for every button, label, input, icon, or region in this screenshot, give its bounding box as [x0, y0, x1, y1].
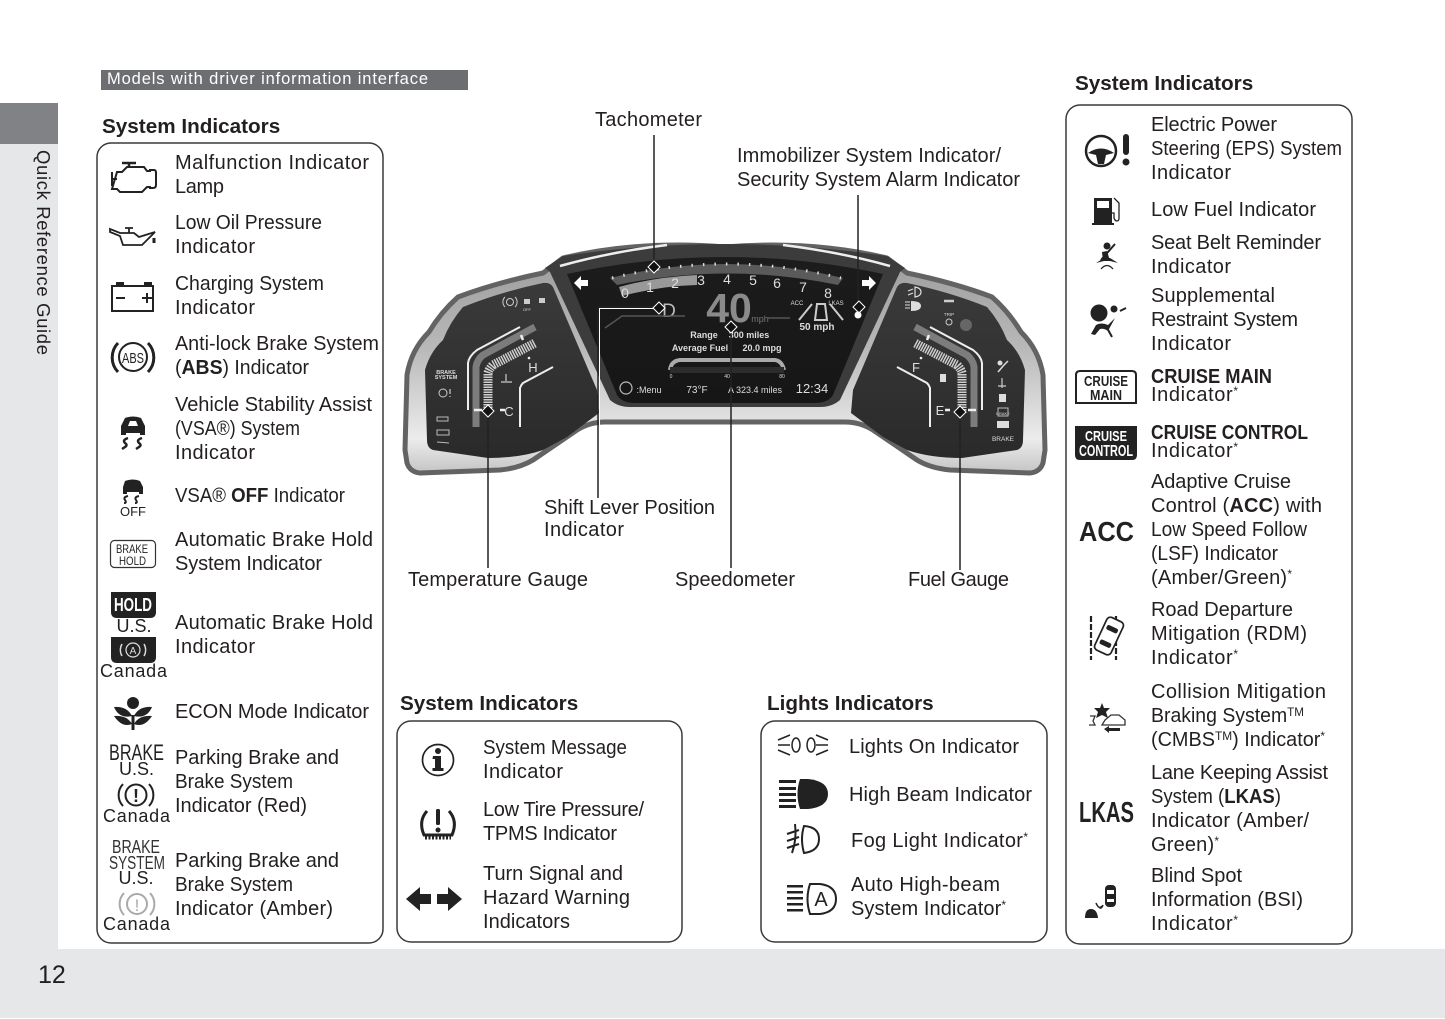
pod labels and tell-tales [435, 287, 1015, 443]
screen readouts: LKAS [828, 301, 844, 307]
icon: auto high beam [787, 884, 836, 914]
pod labels and tell-tales: E [936, 403, 945, 418]
icon: seat belt [1096, 242, 1118, 269]
row: srs: Indicator [1151, 333, 1231, 355]
row: bsi: Information (BSI) [1151, 889, 1303, 911]
callout: tachometer [595, 109, 702, 273]
screen readouts: 2 [671, 275, 679, 291]
panel: right system indicators [1066, 105, 1352, 944]
row: bsi: Indicator [1151, 913, 1233, 935]
row: rdm: Indicator [1151, 647, 1233, 669]
heading: middle system indicators: System Indicators [400, 692, 578, 715]
row: parking brake amber: Parking Brake and [175, 850, 339, 872]
row: cruise control [1151, 422, 1308, 462]
icon: brake hold outline: BRAKE [116, 542, 148, 556]
screen readouts: 40 [706, 285, 752, 331]
icon: turn arrows [406, 887, 462, 911]
row: malfunction indicator: Lamp [175, 176, 224, 198]
icon: brake amber: BRAKE [112, 837, 160, 857]
row: acc: Control (ACC) with [1151, 495, 1322, 517]
pod labels and tell-tales: BRAKE [436, 370, 456, 376]
row: parking brake red [175, 747, 339, 817]
icon: cruise control [1075, 426, 1137, 460]
row: cmbs: TM [1287, 705, 1304, 719]
row: cruise main: * [1233, 384, 1238, 398]
icon: steering wheel [1086, 134, 1130, 166]
row: system message [483, 737, 627, 783]
row: seat belt: Seat Belt Reminder [1151, 232, 1321, 254]
sidebar tab [0, 103, 58, 144]
pod labels and tell-tales: OFF [523, 307, 532, 312]
row: cruise main [1151, 366, 1272, 406]
row: bsi [1151, 865, 1303, 935]
row: cruise main: Indicator [1151, 384, 1233, 406]
sidebar label: Quick Reference Guide [33, 150, 54, 355]
row: system message: System Message [483, 737, 627, 759]
row: auto high beam: System Indicator [851, 898, 1001, 920]
screen readouts: 4 [723, 271, 731, 287]
icon: auto high beam: A [814, 889, 828, 911]
row: cruise control: CRUISE CONTROL [1151, 422, 1308, 444]
pod labels and tell-tales: HOLD [996, 423, 1010, 429]
pod labels and tell-tales: H [528, 360, 538, 375]
row: lkas: * [1214, 834, 1219, 848]
row: lkas: Indicator (Amber/ [1151, 810, 1309, 832]
row: lkas: System (LKAS) [1151, 786, 1281, 808]
row: charging system [175, 273, 324, 319]
screen readouts [574, 271, 876, 396]
row: rdm: Road Departure [1151, 599, 1293, 621]
screen readouts: 1 [646, 279, 654, 295]
row: turn signal: Turn Signal and [483, 863, 623, 885]
icon: cruise main: MAIN [1090, 387, 1122, 404]
row: malfunction indicator [175, 152, 369, 198]
panel: left system indicators [97, 143, 383, 943]
heading: lights indicators: Lights Indicators [767, 692, 934, 715]
row: cmbs [1151, 681, 1326, 751]
callout: tachometer: Tachometer [595, 109, 702, 131]
row: turn signal: Hazard Warning [483, 887, 630, 909]
icon: cmbs [1089, 703, 1125, 733]
callout: fuel gauge [908, 406, 1009, 591]
icon: acc: ACC [1079, 516, 1134, 547]
row: acc: Low Speed Follow [1151, 519, 1308, 541]
icon: rdm [1091, 616, 1125, 660]
row: bsi: Blind Spot [1151, 865, 1242, 887]
icon: vsa off: OFF [120, 504, 146, 519]
icon: lkas: LKAS [1079, 797, 1134, 829]
icon: brake hold outline [110, 540, 156, 568]
cluster bezel [405, 245, 1045, 473]
screen readouts: D [662, 301, 676, 322]
row: auto high beam: * [1001, 898, 1006, 912]
icon: brake amber: U.S. [118, 868, 154, 888]
row: rdm [1151, 599, 1307, 669]
screen readouts: 40 [724, 374, 730, 380]
panel: middle system indicators [397, 721, 682, 942]
icon: hold us canada: Canada [100, 661, 168, 681]
heading: right system indicators: System Indicators [1075, 72, 1253, 95]
row: parking brake amber: Indicator (Amber) [175, 898, 333, 920]
icon: battery [112, 284, 153, 311]
row: rdm: * [1233, 647, 1238, 661]
row: srs: Restraint System [1151, 309, 1298, 331]
row: cruise control: * [1233, 440, 1238, 454]
icon: lights on [778, 735, 828, 755]
right gauge pod [851, 283, 1025, 458]
icon: hold us canada: A [130, 646, 137, 657]
icon: brake amber: Canada [103, 914, 171, 934]
row: automatic brake hold: Indicator [175, 636, 255, 658]
screen readouts: 80 [779, 374, 785, 380]
row: eps: Indicator [1151, 162, 1231, 184]
row: acc: (LSF) Indicator [1151, 543, 1278, 565]
row: rdm: Mitigation (RDM) [1151, 623, 1307, 645]
row: turn signal [483, 863, 630, 933]
icon: brake red: U.S. [119, 759, 154, 779]
row: malfunction indicator: Malfunction Indicator [175, 152, 369, 174]
icon: brake red: Canada [103, 806, 171, 826]
row: acc [1151, 471, 1322, 589]
icon: brake red: BRAKE [109, 740, 164, 765]
row: automatic brake hold [175, 612, 373, 658]
icon: cruise main [1076, 371, 1136, 404]
row: cmbs: (CMBS [1151, 729, 1215, 751]
row: eps [1151, 114, 1342, 184]
model banner: Models with driver information interface [107, 70, 428, 88]
center screen [545, 244, 905, 407]
row: parking brake red: Parking Brake and [175, 747, 339, 769]
row: eps: Electric Power [1151, 114, 1277, 136]
tachometer arc [610, 264, 843, 296]
row: oil pressure: Low Oil Pressure [175, 212, 322, 234]
row: bsi: * [1233, 913, 1238, 927]
icon: high beam [779, 779, 828, 809]
icon: hold us canada: U.S. [116, 616, 152, 636]
row: vsa off: VSA® OFF Indicator [175, 485, 345, 507]
pod labels and tell-tales: SYSTEM [435, 375, 458, 381]
icon: brake red [103, 740, 171, 826]
icon: brake amber: SYSTEM [109, 853, 165, 873]
row: fog light: Fog Light Indicator [851, 830, 1023, 852]
row: eps: Steering (EPS) System [1151, 138, 1342, 160]
icon: vsa [121, 416, 145, 449]
screen readouts: Range [690, 330, 718, 340]
row: fog light: * [1023, 830, 1028, 844]
icon: econ leaf [114, 697, 152, 730]
screen readouts: :Menu [636, 385, 662, 395]
row: parking brake red: Brake System [175, 771, 293, 793]
row: vsa [175, 394, 372, 464]
icon: fog light [787, 824, 819, 853]
icon: abs: ABS [122, 350, 144, 367]
pod labels and tell-tales: F [912, 360, 920, 375]
screen readouts: 8 [824, 285, 832, 301]
row: vsa: Vehicle Stability Assist [175, 394, 372, 416]
row: turn signal: Indicators [483, 911, 570, 933]
icon: oil can [110, 228, 155, 245]
callout: fuel gauge: Fuel Gauge [908, 569, 1009, 591]
row: cmbs: ) Indicator [1232, 729, 1321, 751]
row: lkas [1151, 762, 1328, 856]
row: acc: (Amber/Green) [1151, 567, 1287, 589]
row: acc: * [1287, 567, 1292, 581]
row: seat belt [1151, 232, 1321, 278]
icon: info [422, 744, 454, 776]
row: tpms: Low Tire Pressure/ [483, 799, 644, 821]
screen readouts: 6 [773, 275, 781, 291]
row: seat belt: Indicator [1151, 256, 1231, 278]
screen readouts: 50 mph [799, 322, 835, 333]
row: lights on: Lights On Indicator [849, 736, 1019, 758]
panel: lights indicators [761, 721, 1047, 942]
pod labels and tell-tales: BRAKE [992, 436, 1015, 443]
row: oil pressure [175, 212, 322, 258]
screen readouts: Average Fuel [672, 343, 728, 353]
row: parking brake amber [175, 850, 339, 920]
icon: cruise main: CRUISE [1084, 373, 1128, 390]
row: cruise main: CRUISE MAIN [1151, 366, 1272, 388]
icon: hold us canada [100, 592, 168, 681]
row: oil pressure: Indicator [175, 236, 255, 258]
pod labels and tell-tales: TRIP [944, 312, 954, 317]
screen readouts: 0 [621, 285, 629, 301]
screen readouts: ACC [791, 301, 804, 307]
row: parking brake red: Indicator (Red) [175, 795, 307, 817]
row: cruise control: Indicator [1151, 440, 1233, 462]
pod labels and tell-tales: C [504, 404, 514, 419]
heading: left system indicators: System Indicators [102, 115, 280, 138]
row: econ: ECON Mode Indicator [175, 701, 369, 723]
callout: shift lever: Indicator [544, 519, 624, 541]
row: cmbs: TM [1215, 729, 1232, 743]
row: system message: Indicator [483, 761, 563, 783]
row: vsa: (VSA®) System [175, 418, 300, 440]
row: vsa: Indicator [175, 442, 255, 464]
screen readouts: 300 miles [729, 330, 769, 340]
row: tpms: TPMS Indicator [483, 823, 617, 845]
icon: cruise control: CONTROL [1079, 443, 1133, 460]
row: auto high beam [851, 874, 1006, 920]
instrument cluster diagram [405, 244, 1045, 473]
row: srs [1151, 285, 1298, 355]
row: automatic brake hold system: System Indicator [175, 553, 322, 575]
row: automatic brake hold system [175, 529, 373, 575]
row: charging system: Charging System [175, 273, 324, 295]
icon: hold us canada: HOLD [114, 595, 152, 615]
row: cmbs: * [1320, 729, 1325, 743]
callout: temperature gauge [408, 405, 588, 591]
screen readouts: 20.0 mpg [742, 343, 782, 353]
callout: shift lever: Shift Lever Position [544, 497, 715, 519]
row: acc: Adaptive Cruise [1151, 471, 1291, 493]
icon: brake red: ! [133, 786, 139, 806]
icon: fuel pump [1092, 198, 1119, 224]
icon: cruise control: CRUISE [1085, 428, 1127, 445]
icon: vsa off [120, 480, 146, 519]
row: high beam: High Beam Indicator [849, 784, 1032, 806]
row: tpms [483, 799, 644, 845]
screen readouts: 73°F [686, 385, 708, 396]
row: abs: (ABS) Indicator [175, 357, 309, 379]
row: parking brake amber: Brake System [175, 874, 293, 896]
page number: 12 [38, 961, 66, 989]
screen readouts: mph [751, 314, 769, 324]
row: automatic brake hold: Automatic Brake Hold [175, 612, 373, 634]
row: automatic brake hold system: Automatic Brake Hold [175, 529, 373, 551]
icon: brake hold outline: HOLD [119, 554, 146, 568]
screen readouts: 0 [670, 374, 673, 380]
callout: immobilizer [737, 145, 1020, 318]
callout: immobilizer: Immobilizer System Indicator/ [737, 145, 1001, 167]
icon: engine [112, 163, 156, 192]
icon: abs [112, 343, 154, 372]
pod labels and tell-tales: BRAKE [996, 411, 1010, 416]
callout: immobilizer: Security System Alarm Indicator [737, 169, 1020, 191]
icon: bsi [1085, 885, 1116, 918]
callout: shift lever [544, 302, 715, 541]
row: lkas: Lane Keeping Assist [1151, 762, 1328, 784]
callout: speedometer [675, 321, 795, 591]
icon: airbag person [1090, 304, 1126, 337]
screen readouts: 7 [799, 279, 807, 295]
row: srs: Supplemental [1151, 285, 1275, 307]
icon: brake amber [103, 837, 171, 934]
row: charging system: Indicator [175, 297, 255, 319]
screen readouts: 5 [749, 272, 757, 288]
left gauge pod [425, 283, 599, 458]
row: cmbs: Braking System [1151, 705, 1291, 727]
screen readouts: 3 [697, 272, 705, 288]
screen readouts: 12:34 [796, 381, 828, 396]
row: abs [175, 333, 379, 379]
screen readouts: A 323.4 miles [728, 385, 783, 395]
row: auto high beam: Auto High-beam [851, 874, 1000, 896]
callout: speedometer: Speedometer [675, 569, 795, 591]
callout: temperature gauge: Temperature Gauge [408, 569, 588, 591]
row: cmbs: Collision Mitigation [1151, 681, 1326, 703]
row: low fuel: Low Fuel Indicator [1151, 199, 1316, 221]
icon: tpms [422, 809, 454, 838]
row: lkas: Green) [1151, 834, 1214, 856]
row: abs: Anti-lock Brake System [175, 333, 379, 355]
icon: brake amber: ! [135, 896, 139, 915]
